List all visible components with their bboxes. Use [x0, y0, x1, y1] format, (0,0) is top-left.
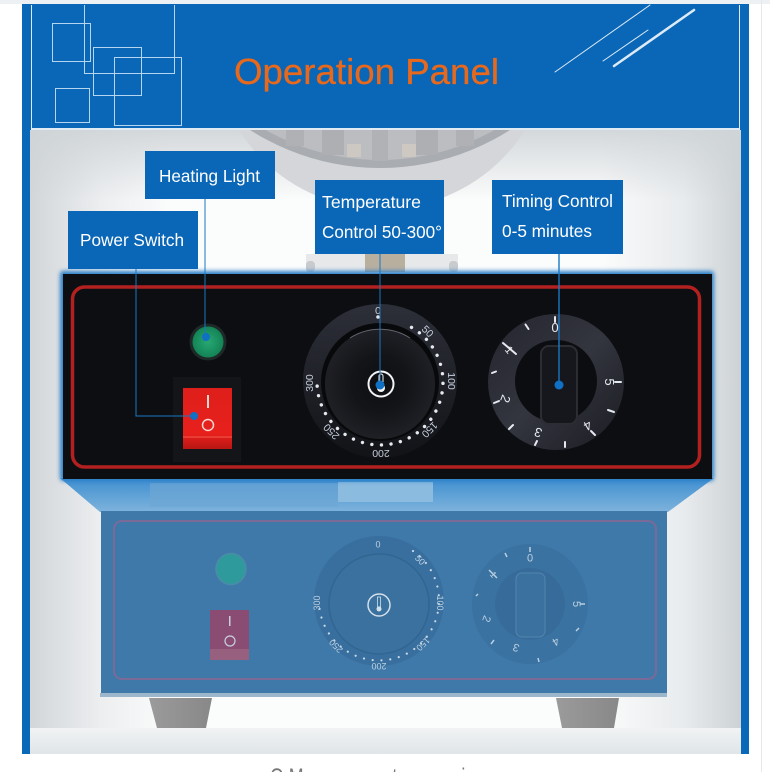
lower timing dial: 2	[479, 614, 493, 624]
decorative diagonal lines	[555, 5, 694, 72]
callout: timing control: Timing Control	[502, 191, 613, 211]
callout: power switch	[68, 211, 198, 269]
lower timing dial: 1	[488, 570, 499, 580]
waffle plate behind panel	[248, 130, 516, 197]
power switch	[183, 388, 232, 449]
callout: timing control: 0-5 minutes	[502, 221, 592, 241]
timer digits: 2	[497, 393, 514, 405]
title: Operation Panel	[234, 51, 499, 92]
lower timing dial	[472, 544, 588, 664]
lower timing dial: 4	[550, 634, 561, 648]
callout leader lines	[136, 199, 559, 416]
timing dial	[488, 314, 624, 450]
dial scale: 200	[372, 447, 390, 459]
panel underside reflection	[60, 478, 714, 512]
lower temperature dial: 300	[312, 595, 322, 611]
page top strip	[0, 0, 770, 4]
dial scale: 100	[445, 372, 457, 390]
timer digits	[500, 323, 614, 437]
lower temperature dial: 100	[435, 595, 445, 611]
timer digits: 0	[551, 320, 559, 335]
dial scale: 150	[419, 419, 440, 440]
lower panel copy, tinted blue	[100, 511, 667, 697]
lower timing dial: 0	[527, 551, 533, 563]
lower red outline	[114, 521, 656, 679]
red outline	[72, 287, 700, 467]
main control panel	[63, 274, 712, 479]
photo background	[30, 130, 741, 754]
callout: timing control	[492, 180, 623, 254]
dial scale: 250	[321, 421, 342, 442]
dial scale: 300	[304, 374, 316, 392]
lower timing dial: 3	[511, 640, 521, 654]
timer scale	[492, 317, 621, 447]
upper panel glow	[60, 271, 714, 481]
callout: temperature control: Temperature	[322, 192, 421, 212]
header band	[31, 5, 740, 130]
dial scale: 50	[419, 323, 436, 340]
callout: temperature control	[315, 180, 444, 254]
temperature dial	[303, 304, 457, 459]
timer digits: 5	[602, 378, 617, 386]
dial dots	[317, 327, 443, 445]
right page edge	[761, 0, 762, 772]
callout: heating light: Heating Light	[159, 166, 260, 186]
heating light	[190, 324, 226, 360]
lower temperature dial: 200	[371, 661, 387, 671]
callout dots	[190, 333, 564, 420]
lower temperature dial: 150	[414, 635, 432, 653]
floor	[30, 728, 741, 754]
lower temperature dial: 0	[375, 539, 381, 549]
dial scale: 0	[375, 304, 381, 316]
decorative squares	[52, 5, 182, 126]
thermometer icon	[368, 372, 394, 396]
callout: power switch: Power Switch	[80, 230, 184, 250]
timer digits: 1	[502, 344, 515, 356]
lower temperature dial: 50	[413, 553, 427, 567]
lower switch	[210, 610, 249, 660]
timer digits: 3	[532, 424, 544, 441]
lower temperature dial	[312, 536, 445, 671]
timer digits: 4	[581, 417, 595, 434]
lower timing dial: 5	[570, 601, 582, 607]
dial scale	[304, 304, 457, 459]
callout: heating light	[145, 151, 275, 199]
hinge below plate	[306, 254, 458, 272]
feet	[149, 698, 619, 728]
lower light	[216, 554, 246, 584]
lower temperature dial: 250	[327, 637, 345, 655]
callout: temperature control: Control 50-300°	[322, 222, 442, 242]
